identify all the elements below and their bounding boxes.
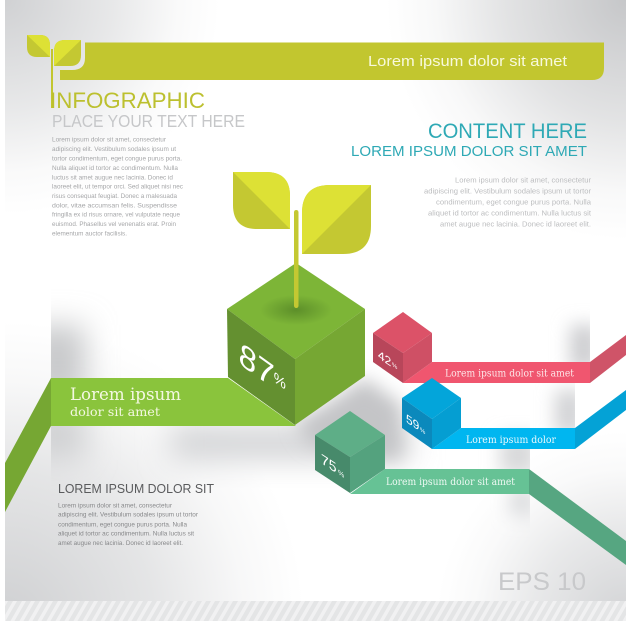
icon: small sprout logo: [27, 35, 81, 108]
subtitle: PLACE YOUR TEXT HERE: [52, 111, 245, 131]
ribbon: green: [5, 378, 296, 512]
red cube 42%: [373, 312, 432, 383]
text block: intro paragraph: risus consequat feugiat. Donec a malesuada: [52, 193, 177, 200]
header banner: [60, 42, 604, 80]
heading: content here: CONTENT HERE: [428, 120, 587, 143]
green cube 87%: [227, 263, 365, 425]
text block: intro paragraph: [52, 137, 184, 238]
value 42%: [378, 347, 397, 371]
subheading: lorem ipsum: LOREM IPSUM DOLOR SIT AMET: [351, 144, 587, 160]
value 75%: 75: [321, 451, 337, 477]
text block: intro paragraph: fringilla ex id risus ornare, vel vulputate neque: [52, 212, 180, 219]
heading: bottom block: LOREM IPSUM DOLOR SIT: [58, 482, 214, 496]
text block: bottom paragraph: condimentum, eget congue purus porta. Nulla: [58, 521, 187, 528]
ribbon: teal: [350, 469, 626, 565]
banner caption: Lorem ipsum dolor sit amet: [368, 53, 568, 70]
value 87%: %: [273, 369, 287, 394]
value 59%: [406, 411, 425, 436]
ribbon label: Lorem ipsum dolor sit amet: [445, 368, 574, 380]
blue cube 59%: [402, 378, 461, 449]
ribbon label: Lorem ipsum dolor sit amet: [386, 477, 515, 488]
value 75%: %: [338, 468, 344, 480]
text block: bottom paragraph: Lorem ipsum dolor sit amet, consectetur: [58, 502, 173, 509]
text block: bottom paragraph: adipiscing elit. Vestibulum sodales ipsum ut tortor: [58, 512, 199, 519]
text block: intro paragraph: elementum auctor facilisis.: [52, 231, 127, 238]
ribbon label: Lorem ipsum: [70, 385, 181, 405]
ribbon label: [70, 385, 181, 419]
text block: bottom paragraph: aliquet id tortor ac condimentum. Nulla luctus sit: [58, 531, 194, 538]
ribbon: blue: [432, 390, 626, 449]
title: INFOGRAPHIC: [50, 88, 205, 113]
text block: right paragraph: adipiscing elit. Vestibulum sodales ipsum ut tortor: [424, 188, 592, 196]
EPS 10 label: EPS 10: [498, 568, 586, 596]
value 59%: 59: [406, 411, 419, 434]
cast shadows: [30, 325, 598, 516]
text block: right paragraph: [424, 178, 592, 228]
ribbon label: dolor sit amet: [70, 404, 160, 419]
text block: bottom paragraph: amet augue nec lacinia. Donec id laoreet elit.: [58, 540, 183, 547]
text block: intro paragraph: laoreet elit, ut tempor orci. Sed aliquet nisi nec: [52, 184, 184, 191]
text block: intro paragraph: Lorem ipsum dolor sit amet, consectetur: [52, 137, 167, 144]
text block: intro paragraph: euismod. Phasellus vel venenatis erat. Proin: [52, 221, 176, 228]
text block: intro paragraph: tortor condimentum, eget congue purus porta.: [52, 156, 182, 163]
icon: sprout on cube: [233, 172, 371, 308]
text block: bottom paragraph: [58, 502, 199, 547]
text block: right paragraph: amet augue nec lacinia. Donec id laoreet elit.: [440, 222, 591, 228]
text block: right paragraph: aliquet id tortor ac condimentum. Nulla luctus sit: [428, 210, 591, 218]
striped footer band: [5, 601, 626, 621]
value 75%: [321, 451, 344, 480]
text block: intro paragraph: adipiscing elit. Vestibulum sodales ipsum ut: [52, 146, 176, 153]
text block: intro paragraph: luctus sit amet augue nec lacinia. Donec id: [52, 174, 173, 181]
text block: right paragraph: condimentum, eget congue purus porta. Nulla: [436, 200, 591, 206]
teal cube 75%: [315, 411, 385, 493]
value 59%: %: [420, 426, 425, 436]
text block: intro paragraph: dolor, vitae accumsan felis. Suspendisse: [52, 202, 177, 209]
value 42%: %: [392, 361, 397, 371]
value 87%: 87: [237, 335, 276, 395]
value 42%: 42: [378, 347, 391, 370]
ribbon: red: [403, 335, 626, 383]
text block: right paragraph: Lorem ipsum dolor sit amet, consectetur: [455, 178, 592, 184]
ribbon label: Lorem ipsum dolor: [466, 435, 556, 446]
text block: intro paragraph: Nulla aliquet id tortor ac condimentum. Nulla: [52, 165, 178, 172]
